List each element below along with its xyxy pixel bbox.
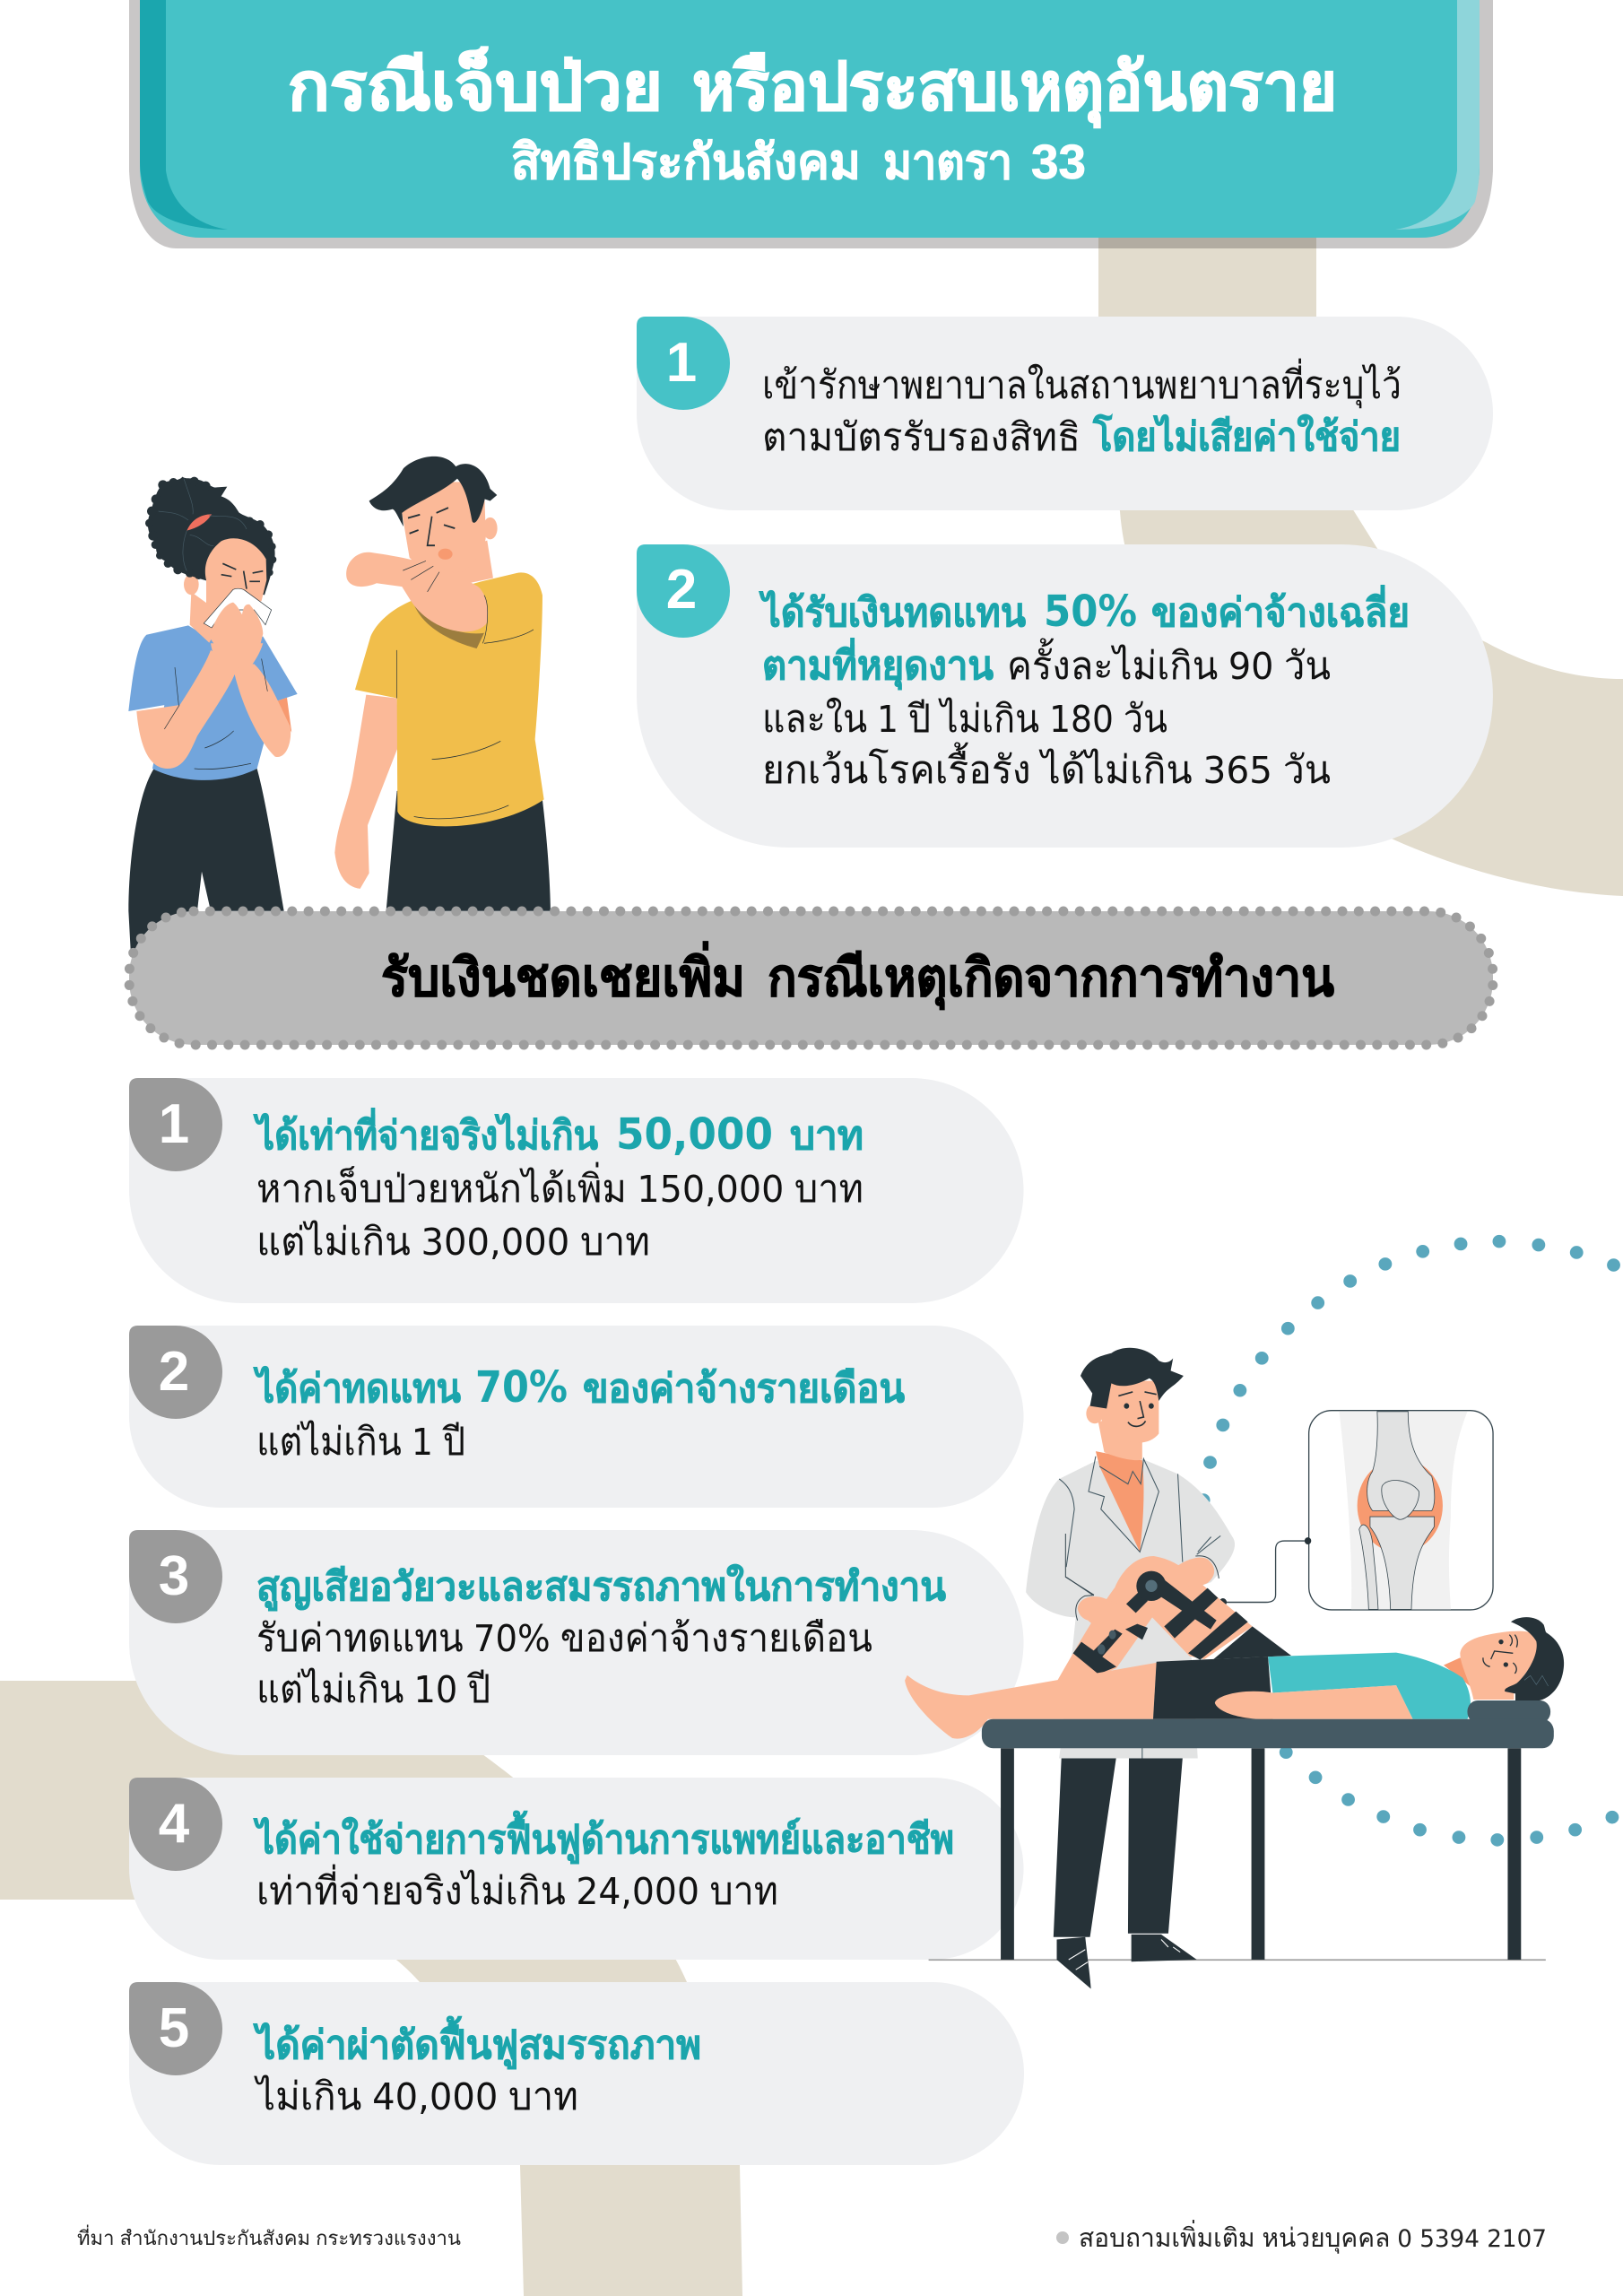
benefit 1 text: เข้ารักษาพยาบาลในสถานพยาบาลที่ระบุไว้ [762,359,1402,409]
item 3 text: รับค่าทดแทน 70% ของค่าจ้างรายเดือน [256,1617,872,1660]
item 2 text: 70% [475,1362,568,1413]
item 2 text: แต่ไม่เกิน 1 ปี [256,1420,465,1464]
section banner: additional compensation [129,911,1493,1045]
number badge 1: 1 [666,332,697,394]
item 1 text: ได้เท่าที่จ่ายจริงไม่เกิน [253,1108,598,1158]
patient [905,1653,1472,1739]
number badge 3 [129,1530,222,1623]
number badge 2 [129,1326,222,1419]
background band: top right beige curve [1098,238,1623,896]
item 3 text [256,1563,946,1711]
number badge 1: 1 [159,1093,189,1155]
item 3 text: แต่ไม่เกิน 10 ปี [256,1667,490,1711]
item 1 text: บาท [790,1114,864,1158]
subtitle: สิทธิประกันสังคม [511,135,861,189]
panel: compensation item 2 [129,1326,1024,1508]
section heading [381,941,1334,1011]
benefit 2 text: ครั้งละไม่เกิน 90 วัน [1007,638,1331,688]
man [334,457,551,911]
item 3 text: สูญเสียอวัยวะและสมรรถภาพในการทำงาน [256,1563,946,1611]
woman [128,477,298,956]
panel: compensation item 5 [129,1982,1024,2165]
item 1 text: แต่ไม่เกิน 300,000 บาท [256,1220,650,1264]
title [288,48,1337,128]
header banner [129,0,1493,248]
patient head [1460,1617,1564,1701]
section heading: รับเงินชดเชยเพิ่ม [381,941,745,1007]
item 1 text: หากเจ็บป่วยหนักได้เพิ่ม 150,000 บาท [256,1162,864,1211]
doctor hands on knee [1076,1556,1219,1630]
number badge 1 [129,1078,222,1171]
treatment table top and pillow [982,1700,1554,1748]
item 4 text: ได้ค่าใช้จ่ายการฟื้นฟูด้านการแพทย์และอาชีพ [253,1810,954,1864]
item 1 text: 50,000 [616,1109,773,1160]
number badge 4: 4 [159,1793,190,1855]
benefit 2 text: ของค่าจ้างเฉลี่ย [1151,585,1410,635]
illustration: woman and man sneezing [128,457,551,956]
subtitle: มาตรา [883,135,1012,189]
subtitle [511,135,1086,189]
title: กรณีเจ็บป่วย [288,48,663,124]
panel: compensation item 4 [129,1778,1024,1960]
item 5 text [253,2015,701,2118]
benefit 1 text [762,359,1402,459]
item 5 text: ได้ค่าผ่าตัดฟื้นฟูสมรรถภาพ [253,2015,701,2069]
connector line [1219,1537,1311,1606]
item 1 text [253,1108,864,1264]
panel: benefit 2 [637,544,1493,848]
benefit 1 text: ตามบัตรรับรองสิทธิ [762,416,1081,459]
item 2 text [253,1362,905,1464]
benefit 2 text: ยกเว้นโรคเรื้อรัง ได้ไม่เกิน 365 วัน [762,742,1331,792]
panel: compensation item 3 [129,1530,1024,1755]
footer: source: ที่มา สำนักงานประกันสังคม กระทรวงแรงงาน [77,2224,461,2249]
panel: benefit 1 [637,317,1493,510]
panel: compensation item 1 [129,1078,1024,1303]
number badge 2: 2 [159,1341,189,1403]
item 4 text [253,1810,954,1913]
number badge 4 [129,1778,222,1871]
section heading: กรณีเหตุเกิดจากการทำงาน [768,949,1334,1011]
illustration: doctor treating patient knee [905,1235,1620,1989]
benefit 2 text [759,585,1410,792]
benefit 2 text: ได้รับเงินทดแทน [759,589,1026,635]
doctor [1026,1348,1235,1989]
item 5 text: ไม่เกิน 40,000 บาท [254,2074,578,2118]
item 2 text: ของค่าจ้างรายเดือน [583,1367,905,1411]
benefit 2 text: 50% [1044,587,1137,637]
title: หรือประสบเหตุอันตราย [692,49,1337,128]
benefit 2 text: และใน 1 ปี ไม่เกิน 180 วัน [762,697,1167,741]
table legs and floor [929,1748,1546,1961]
item 2 text: ได้ค่าทดแทน [253,1365,461,1411]
number badge 2: 2 [666,559,697,621]
footer: contact: สอบถามเพิ่มเติม หน่วยบุคคล 0 5394 2107 [1079,2220,1547,2254]
subtitle: 33 [1031,135,1086,189]
number badge 1 [637,317,730,410]
item 4 text: เท่าที่จ่ายจริงไม่เกิน 24,000 บาท [256,1865,778,1913]
dotted arc [1197,1235,1620,1847]
knee anatomy inset [1309,1411,1493,1610]
benefit 1 text: โดยไม่เสียค่าใช้จ่าย [1092,413,1401,459]
benefit 2 text: ตามที่หยุดงาน [762,638,994,691]
number badge 5: 5 [159,1997,189,2059]
raised leg and knee brace [1055,1534,1291,1684]
background band: bottom left beige curve [0,1681,742,2296]
number badge 5 [129,1982,222,2075]
number badge 2 [637,544,730,638]
number badge 3: 3 [159,1545,189,1607]
